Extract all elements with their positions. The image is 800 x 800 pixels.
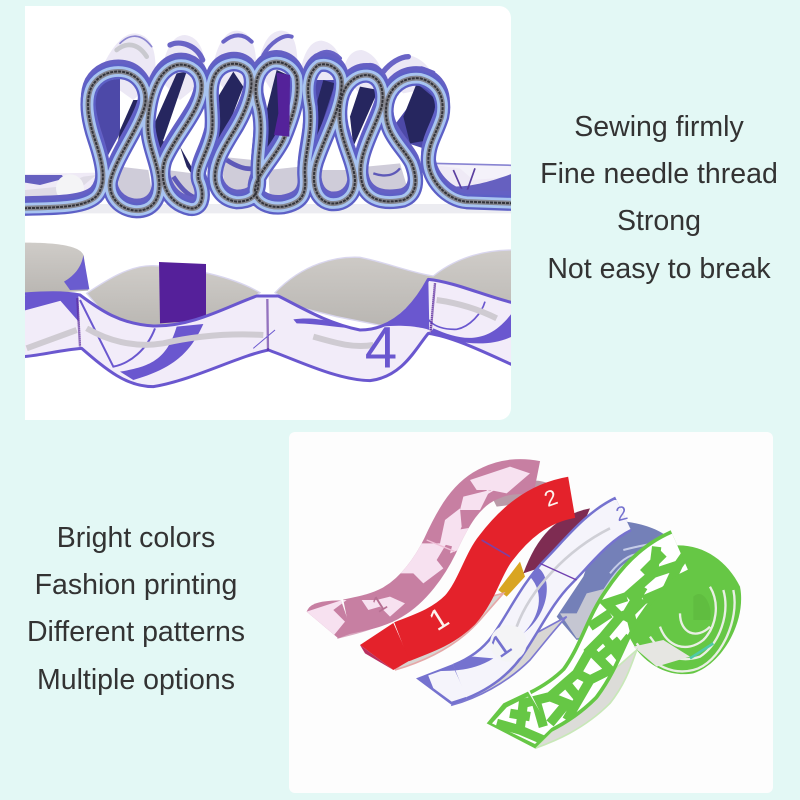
seams (77, 283, 435, 351)
yellow inner of red band (498, 562, 525, 597)
photo: folded band loops (20, 31, 515, 213)
green band (480, 533, 741, 753)
band edge serpentine (20, 57, 513, 211)
purple swooshes (24, 293, 79, 322)
flat right tail (437, 164, 499, 186)
text block: sewing features: Sewing firmly (574, 111, 744, 143)
green roll (623, 545, 741, 674)
text block: sewing features (540, 111, 778, 285)
panel: four coloured bands photo (289, 432, 773, 793)
purple tab (159, 262, 206, 323)
purple stripes on tops (117, 35, 433, 73)
panel: stitched loops photo (20, 6, 515, 420)
text block: colour features (27, 522, 245, 696)
text block: colour features: Bright colors (57, 522, 215, 554)
text block: sewing features: Fine needle thread (540, 158, 778, 190)
purple tab (274, 73, 290, 137)
blue-violet band (416, 496, 632, 706)
text block: colour features: Multiple options (37, 664, 235, 696)
lower inner lavender (118, 158, 406, 199)
blue-violet band: 2 (614, 502, 630, 526)
inside faces of loops (92, 78, 442, 157)
pink band (303, 467, 552, 640)
red band: 2 (541, 484, 561, 512)
red band (360, 484, 572, 670)
text block: sewing features: Strong (617, 205, 701, 237)
pink band: 2 (476, 471, 499, 499)
text block: colour features: Fashion printing (35, 569, 237, 601)
blue-violet roll (557, 520, 670, 640)
front of band (23, 279, 515, 387)
photo: opened band with number 4 (23, 243, 515, 387)
text block: colour features: Different patterns (27, 616, 245, 648)
grey stripes (27, 300, 497, 348)
flat left tail (25, 172, 95, 190)
text block: sewing features: Not easy to break (547, 253, 771, 285)
lavender loop tops (98, 31, 437, 100)
pink band: 1 (368, 590, 391, 617)
grey inner faces (23, 243, 88, 295)
number 4: 4 (365, 316, 397, 381)
red band: 1 (423, 601, 455, 638)
green band: 1 (557, 670, 590, 707)
blue-violet band: 1 (484, 627, 518, 665)
white shards (492, 534, 688, 744)
